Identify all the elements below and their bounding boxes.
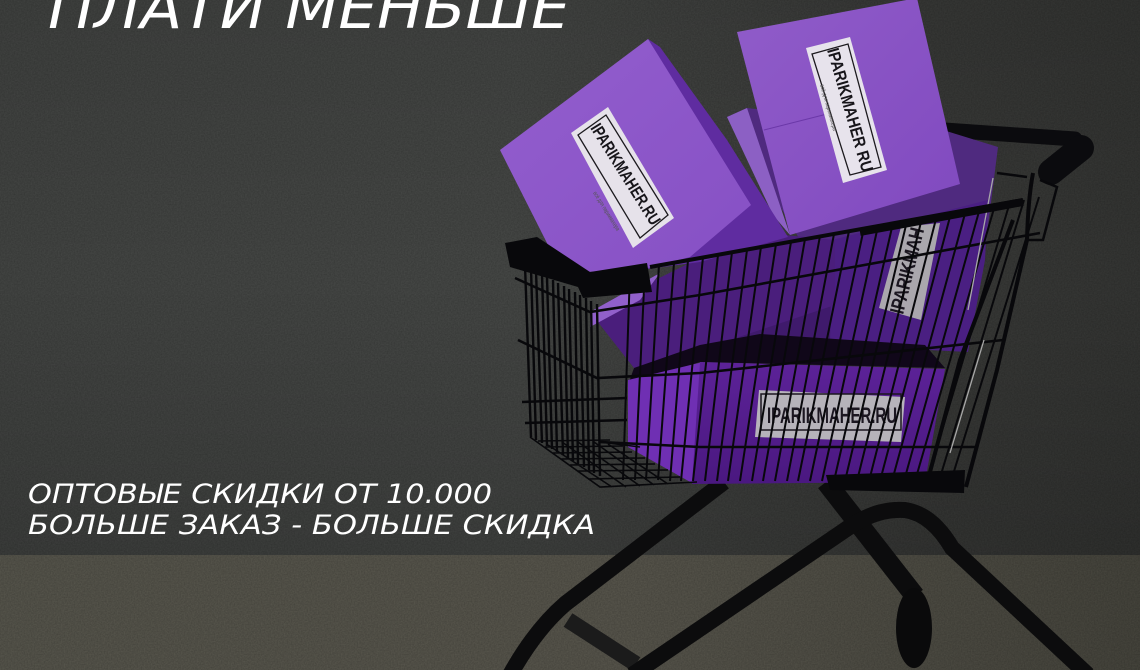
left box label [571,107,674,248]
discount text block: ОПТОВЫЕ СКИДКИ ОТ 10.000 [28,479,492,510]
right frame [930,173,1033,487]
right box label: всё для парикмахера [818,84,837,132]
shopping cart basket [505,173,1057,493]
back box label [879,223,940,320]
discount text block [28,479,595,541]
cart handle [930,129,1081,172]
horizontal wires [515,233,1040,447]
purple box: upper right [737,0,960,235]
purple boxes inside the basket [590,108,998,484]
cart legs and wheel [510,482,1088,670]
rim [505,237,652,298]
left box label: всё для парикмахера [591,191,620,233]
floor [0,555,1140,670]
lower box label [755,390,905,442]
right box label [806,37,887,183]
lower box label: IPARIKMAHER.RU [767,403,897,428]
left box label: IPARIKMAHER.RU [587,120,664,228]
left side wires [525,265,600,476]
purple box: upper left [500,39,788,272]
front wires [623,197,1039,481]
discount text block: БОЛЬШЕ ЗАКАЗ - БОЛЬШЕ СКИДКА [28,510,595,541]
right box label: IPARIKMAHER RU [823,46,877,174]
basket floor mesh [530,437,697,487]
back box label: IPARIKMAH [887,226,929,316]
